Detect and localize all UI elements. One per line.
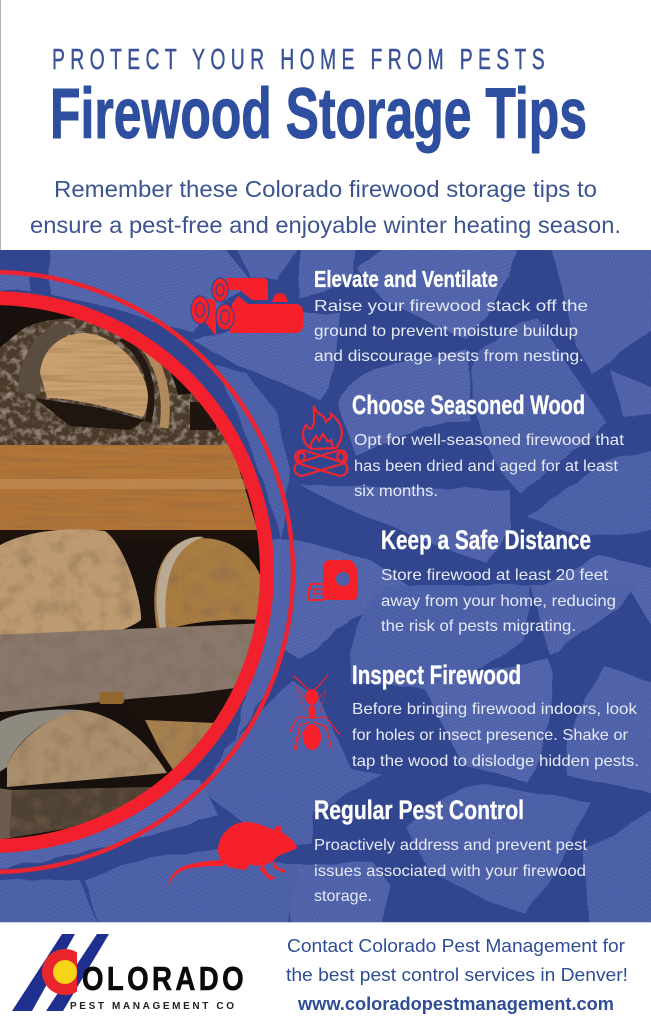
icon: ant [289, 675, 340, 750]
contact text: the best pest control services in Denver! [286, 965, 628, 985]
tip 5: regular pest control: issues associated with your firewood [314, 863, 586, 880]
tip 3: keep a safe distance [381, 525, 616, 635]
thin red ring [0, 272, 293, 872]
intro text: Remember these Colorado firewood storage tips to [54, 176, 597, 202]
tip 2: choose seasoned wood [352, 390, 625, 500]
top log dark inner ring [122, 338, 151, 422]
tip 1: elevate and ventilate [314, 266, 588, 365]
company logo: PEST MANAGEMENT CO [70, 1001, 234, 1012]
background: blue split-wood panel [0, 245, 651, 930]
dark gap [122, 688, 234, 704]
tip 4: inspect firewood: for holes or insect presence. Shake or [352, 727, 629, 744]
tip 4: inspect firewood: Before bringing firewood indoors, look [352, 701, 638, 718]
top log bark [0, 318, 232, 450]
tip 2: choose seasoned wood: six months. [354, 483, 438, 500]
top log gray edge [18, 322, 78, 395]
tip 1: elevate and ventilate: Elevate and Ventilate [314, 266, 498, 292]
footer panel [12, 934, 626, 1014]
tip 4: inspect firewood: Inspect Firewood [352, 660, 521, 690]
header panel [0, 0, 651, 250]
contact text: Contact Colorado Pest Management for [287, 936, 625, 956]
company logo: OLORADO [82, 960, 247, 997]
intro text [30, 176, 621, 238]
tip 1: elevate and ventilate: ground to prevent moisture buildup [314, 323, 578, 340]
bottom log [10, 787, 153, 838]
contact text: www.coloradopestmanagement.com [297, 994, 614, 1014]
tip 3: keep a safe distance: Keep a Safe Distance [381, 525, 591, 555]
tip 3: keep a safe distance: away from your home, reducing [381, 593, 616, 610]
tip 4: inspect firewood: tap the wood to dislodge hidden pests. [352, 753, 639, 770]
tip 3: keep a safe distance: the risk of pests migrating. [381, 618, 576, 635]
tip 2: choose seasoned wood: has been dried and aged for at least [354, 458, 619, 475]
icon: rat [168, 822, 297, 886]
icon: campfire [293, 406, 349, 478]
left half log [0, 529, 141, 639]
lower half log [7, 710, 167, 787]
tip 5: regular pest control: Proactively address and prevent pest [314, 837, 588, 854]
tip 5: regular pest control: Regular Pest Control [314, 795, 524, 825]
tip 1: elevate and ventilate: and discourage pests from nesting. [314, 348, 584, 365]
tip 5: regular pest control [314, 795, 588, 905]
brown lower piece [145, 720, 215, 770]
thick red ring [0, 298, 267, 846]
tip 3: keep a safe distance: Store firewood at least 20 feet [381, 567, 609, 584]
plank [0, 445, 258, 532]
top log face [40, 333, 148, 417]
company logo [12, 934, 247, 1012]
top log right bark rim [143, 351, 170, 429]
firewood photo circle [0, 300, 280, 845]
right half log [154, 538, 262, 630]
tip 2: choose seasoned wood: Opt for well-seasoned firewood that [354, 432, 625, 449]
tip 5: regular pest control: storage. [314, 888, 372, 905]
shadow under top log [35, 398, 145, 430]
tip 1: elevate and ventilate: Raise your firewood stack off the [314, 298, 588, 315]
gray log [0, 623, 270, 713]
contact text [286, 936, 628, 1014]
icon: stacked logs [191, 278, 303, 336]
intro text: ensure a pest-free and enjoyable winter heating season. [30, 212, 621, 238]
tip 4: inspect firewood [352, 660, 639, 770]
icon: tape measure [309, 560, 357, 600]
